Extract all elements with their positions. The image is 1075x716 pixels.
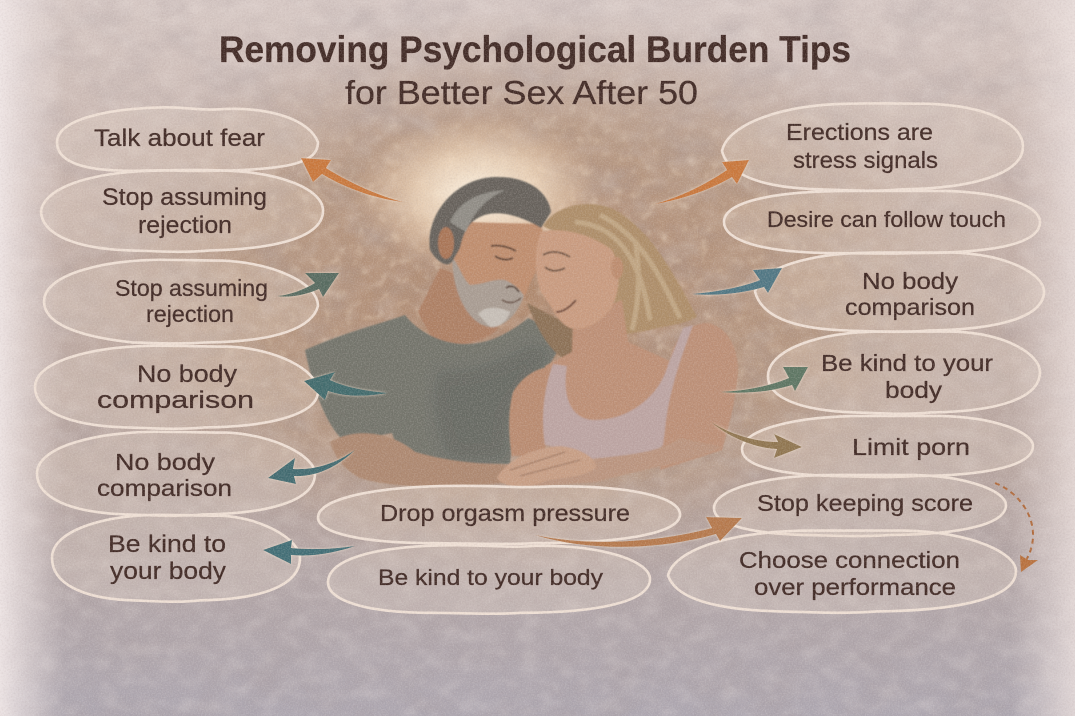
title bbox=[219, 29, 851, 111]
bubble: be kind to your body 1: your body bbox=[110, 558, 226, 585]
bubble: be kind to your body 2: Be kind to your body bbox=[378, 565, 603, 590]
bubble: be kind to your body 3: body bbox=[885, 377, 943, 403]
arrow: teal bottom left bbox=[263, 540, 355, 564]
bubble: choose connection over performance bbox=[668, 531, 1016, 613]
illustration: embracing couple bbox=[305, 177, 738, 488]
bubble: stop keeping score: Stop keeping score bbox=[757, 490, 973, 516]
bubble: erections are stress signals: Erections are bbox=[786, 119, 933, 145]
arrow: orange to talk about fear bbox=[301, 158, 403, 202]
arrow: brown to limit porn bbox=[711, 422, 802, 458]
bubble: choose connection over performance: over performance bbox=[754, 574, 956, 600]
bubble: no body comparison 2: No body bbox=[115, 449, 216, 475]
bubble: no body comparison 3 bbox=[755, 252, 1044, 332]
bubble: no body comparison 3: comparison bbox=[845, 294, 975, 320]
bubble: choose connection over performance: Choose connection bbox=[739, 547, 960, 573]
woman bbox=[497, 204, 738, 488]
bubble: no body comparison 2 bbox=[37, 432, 315, 516]
bubble: stop assuming rejection 2: Stop assuming bbox=[115, 275, 268, 301]
man bbox=[305, 177, 558, 487]
bubble: erections are stress signals bbox=[722, 103, 1023, 191]
arrow: teal lower left bbox=[268, 450, 355, 484]
bubble: be kind to your body 2 bbox=[328, 545, 650, 614]
arrow: long orange to stop keeping score bbox=[535, 517, 742, 547]
bubble: desire can follow touch: Desire can follow touch bbox=[767, 207, 1006, 232]
bottom centre bubbles bbox=[318, 486, 680, 614]
bubble: stop assuming rejection 1 bbox=[41, 170, 323, 252]
bubble: no body comparison 3: No body bbox=[862, 268, 959, 294]
arrow: green from stop assuming bbox=[277, 273, 339, 297]
bubble: be kind to your body 1: Be kind to bbox=[108, 531, 226, 558]
bubble: no body comparison 1: No body bbox=[137, 361, 237, 388]
bubble: limit porn: Limit porn bbox=[852, 434, 970, 460]
bubble: stop assuming rejection 2: rejection bbox=[146, 301, 234, 327]
arrow: teal to no body comparison left bbox=[304, 372, 388, 400]
arrow: orange to erections bbox=[655, 160, 749, 204]
bubble: drop orgasm pressure: Drop orgasm pressure bbox=[380, 500, 630, 526]
bubble: stop assuming rejection 1: rejection bbox=[138, 212, 232, 239]
bubble: drop orgasm pressure bbox=[318, 486, 680, 544]
arrow: teal to no body comparison right bbox=[692, 268, 782, 295]
bubble: stop assuming rejection 2 bbox=[44, 260, 318, 343]
title line 1: Removing Psychological Burden Tips bbox=[219, 29, 851, 70]
bubble: be kind to your body 3: Be kind to your bbox=[821, 350, 993, 376]
bubble: be kind to your body 3 bbox=[768, 332, 1040, 414]
left bubbles column bbox=[35, 107, 323, 602]
arrow: green to be kind to your body bbox=[720, 367, 808, 393]
right bubbles column bbox=[668, 103, 1044, 613]
bubble: stop assuming rejection 1: Stop assuming bbox=[102, 184, 267, 211]
arrows bbox=[263, 158, 1038, 572]
bubble: no body comparison 1 bbox=[35, 346, 318, 429]
bubble: stop keeping score bbox=[714, 475, 1006, 536]
bubble: talk about fear bbox=[57, 107, 318, 171]
bubble: talk about fear: Talk about fear bbox=[94, 125, 265, 152]
subtitle: for Better Sex After 50 bbox=[345, 74, 698, 111]
arrow: dashed curve to choose connection bbox=[995, 483, 1038, 572]
bubble: be kind to your body 1 bbox=[52, 515, 300, 602]
bubble: limit porn bbox=[742, 416, 1033, 477]
bubble: no body comparison 2: comparison bbox=[97, 475, 232, 501]
bubble: erections are stress signals: stress signals bbox=[793, 147, 938, 173]
bubble: desire can follow touch bbox=[724, 191, 1040, 254]
bubble: no body comparison 1: comparison bbox=[97, 387, 254, 414]
